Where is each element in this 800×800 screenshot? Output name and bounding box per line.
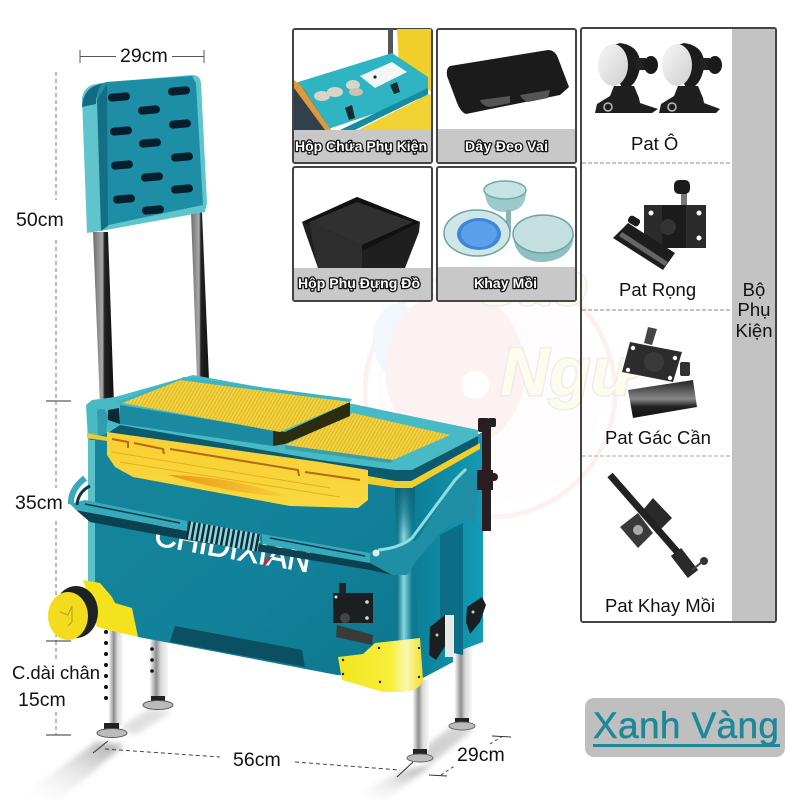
body: corner highlight <box>397 480 412 645</box>
icon: Pat Gác Cần clamp <box>622 327 697 418</box>
label: Khay Mồi: Khay Mồi <box>474 275 537 291</box>
tackle box body <box>48 375 498 692</box>
body: front face <box>88 405 420 680</box>
panel: hộp phụ đựng đồ <box>293 167 432 301</box>
leg: back left <box>143 630 173 710</box>
dimension: leg length <box>12 641 100 735</box>
watermark: logo <box>365 251 645 517</box>
handle: right arm <box>370 467 480 575</box>
dimension: length 56cm <box>93 741 413 777</box>
dimension: length 56cm: 56cm <box>233 749 281 771</box>
label: Hộp Chứa Phụ Kiện: Hộp Chứa Phụ Kiện <box>295 138 427 154</box>
latch: side clamps <box>429 597 486 660</box>
leg: front right <box>407 680 433 762</box>
dimension: height 35cm: 35cm <box>15 492 63 514</box>
yellow corner: right <box>338 638 423 692</box>
handle: front bar <box>70 478 392 575</box>
dimension: backrest width 29cm: 29cm <box>120 45 168 67</box>
poles <box>93 212 209 405</box>
lid: yellow strip <box>87 433 107 441</box>
lid: rim <box>86 375 478 471</box>
image: bait trays <box>444 181 574 262</box>
bar: spring <box>187 530 259 543</box>
body: bottom recess <box>170 626 305 667</box>
leg: back right <box>449 640 475 730</box>
floor shadows <box>15 708 475 800</box>
heading: Bộ Phụ Kiện: Phụ <box>738 299 770 320</box>
colour badge: Xanh Vàng <box>585 698 785 757</box>
rod holder <box>477 418 498 531</box>
dimension: depth 29cm: 29cm <box>457 744 505 766</box>
colour badge: Xanh Vàng: Xanh Vàng <box>593 705 779 746</box>
wheel <box>48 586 98 640</box>
label: Hộp Phụ Đựng Đồ: Hộp Phụ Đựng Đồ <box>298 275 420 291</box>
label: Pat Khay Mồi: Pat Khay Mồi <box>605 595 715 616</box>
bar: dark underside <box>76 510 392 575</box>
brand logo: CHIDIXIAN <box>152 516 314 579</box>
body: right side <box>405 432 483 680</box>
dimension: depth 29cm <box>429 736 511 776</box>
label: Dây Đeo Vai: Dây Đeo Vai <box>465 138 548 154</box>
watermark: logo: Ngư <box>500 334 645 410</box>
icon: Pat Khay Mồi bracket <box>610 475 708 574</box>
heading: Bộ Phụ Kiện: Bộ <box>743 279 765 300</box>
dimension: height 50cm: 50cm <box>16 209 64 231</box>
legs <box>97 625 475 762</box>
backrest slots <box>108 86 193 215</box>
icon: Pat Rọng clamp <box>613 180 706 270</box>
panel: bộ phụ kiện <box>581 28 776 622</box>
panel: hộp chứa phụ kiện <box>293 29 432 163</box>
bar: light top right <box>262 534 370 563</box>
panel: dây đeo vai <box>437 29 576 163</box>
icon: Pat Ô mounts <box>595 43 722 113</box>
label: Pat Ô: Pat Ô <box>631 133 678 154</box>
watermark: logo: Sao <box>478 251 588 318</box>
image: shoulder strap <box>447 50 569 114</box>
leg: front left <box>97 625 127 738</box>
heading: Bộ Phụ Kiện <box>735 279 773 341</box>
latch: yellow front <box>107 432 368 508</box>
tray on lid <box>108 377 352 446</box>
body: left edge highlight <box>88 440 95 585</box>
body: side recess <box>440 523 463 655</box>
image: black box <box>302 197 420 268</box>
latch: front black clamp <box>333 583 373 645</box>
image: accessory tray <box>294 29 431 130</box>
dimension: backrest width 29cm <box>80 45 204 67</box>
lid: hinge bracket <box>97 409 108 436</box>
label: C.dài chân: C.dài chân <box>12 662 100 683</box>
label: Pat Gác Cần: Pat Gác Cần <box>605 427 711 448</box>
label: Pat Rọng: Pat Rọng <box>619 279 696 300</box>
backrest <box>82 75 207 233</box>
heading: Bộ Phụ Kiện: Kiện <box>735 320 773 341</box>
bar: left hook <box>71 478 85 504</box>
yellow corner: left with wheel <box>83 580 138 637</box>
label: 15cm: 15cm <box>18 689 66 711</box>
lid: yellow right section <box>285 413 450 460</box>
bar: light top left <box>70 500 187 531</box>
panel: khay mồi <box>437 167 576 301</box>
